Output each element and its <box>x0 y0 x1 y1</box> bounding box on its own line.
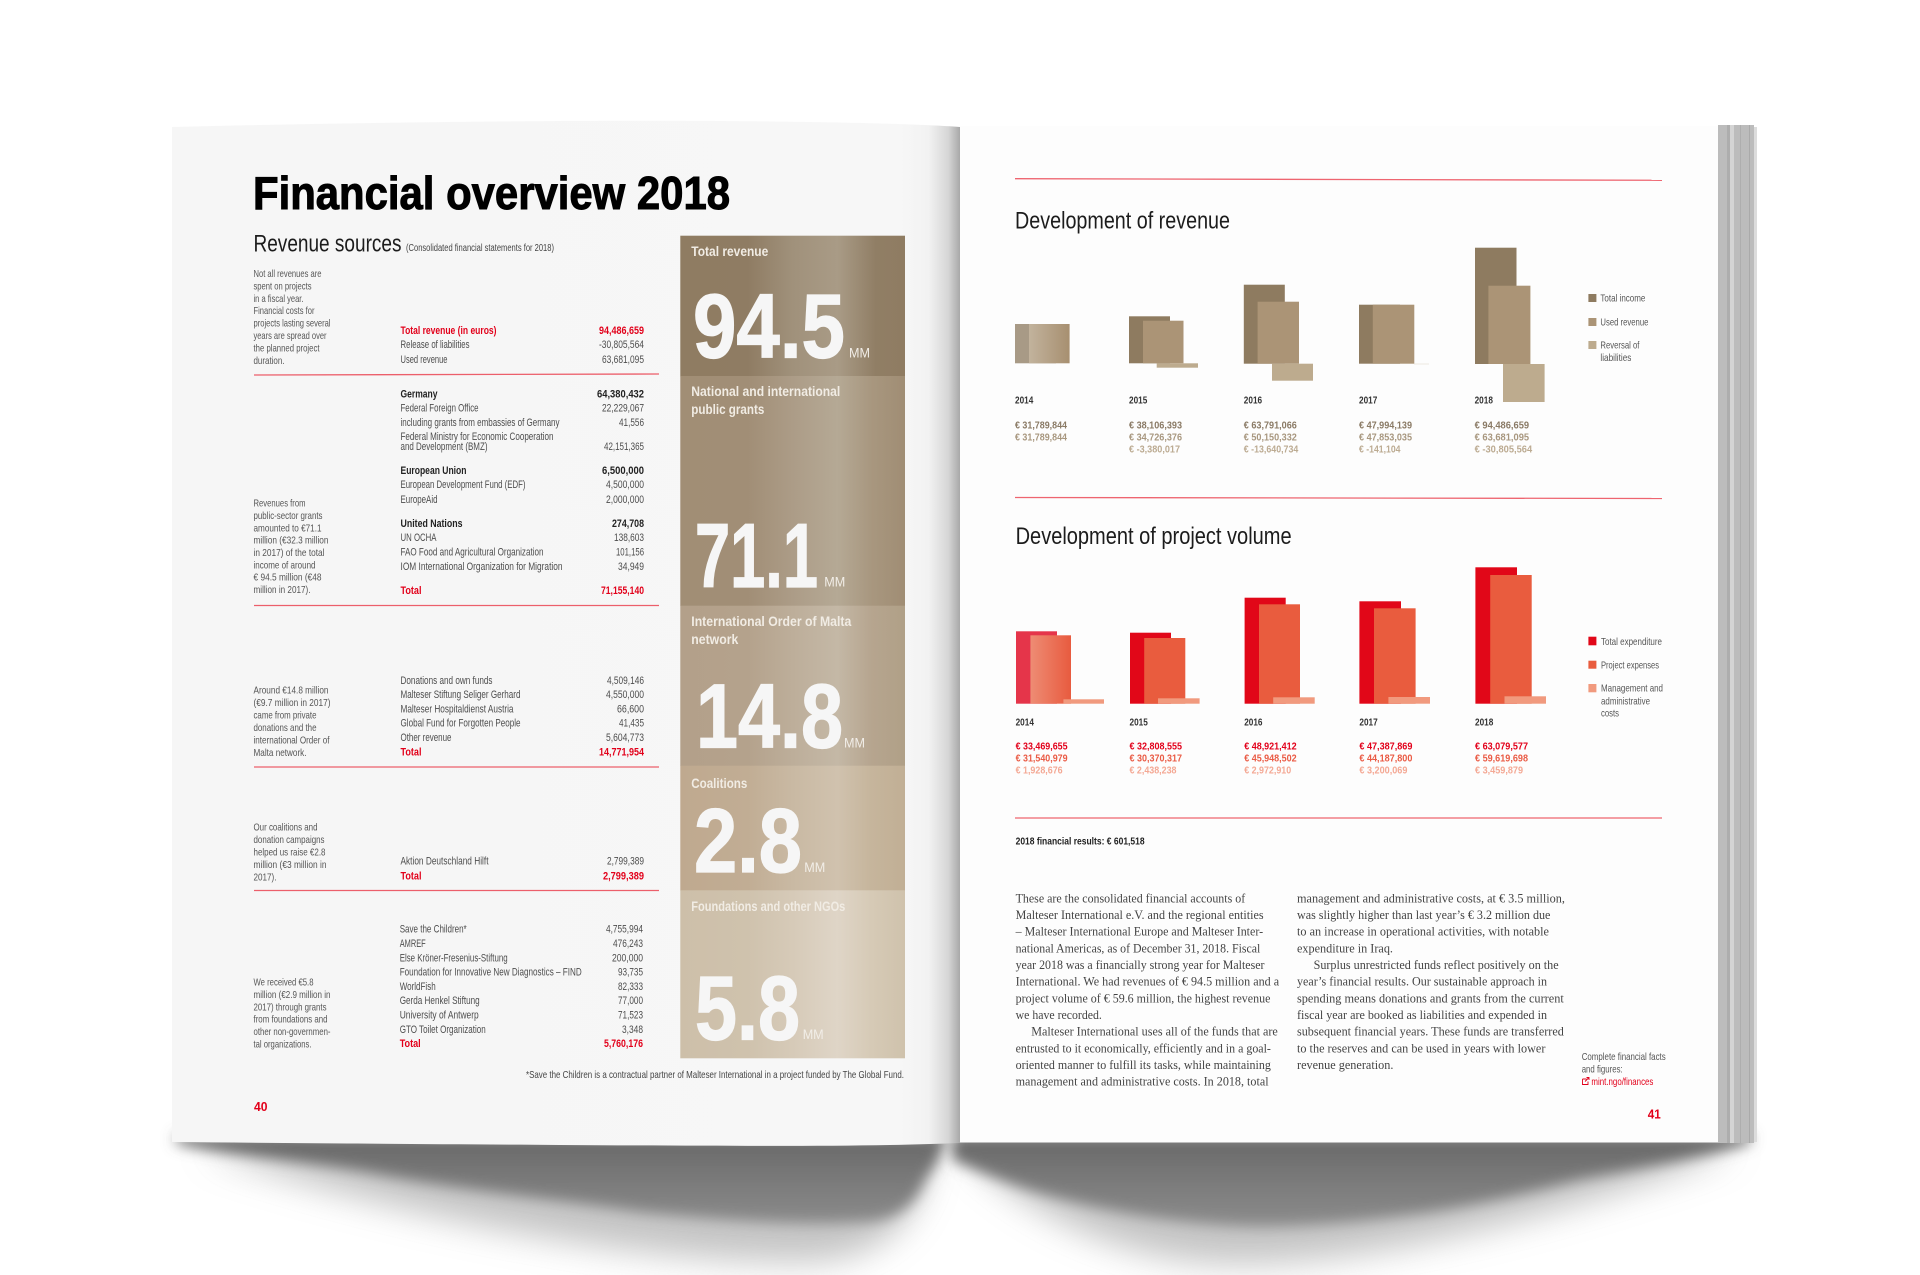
legend: revenue: liabilities <box>1600 352 1631 364</box>
text block: column 1: entrusted to it economically, efficiently and in a goal- <box>1016 1041 1271 1055</box>
note: order of malta: Around €14.8 million <box>254 684 329 696</box>
table: order of malta <box>400 675 645 758</box>
bars 2018 <box>1475 248 1545 402</box>
bars 2015 <box>1130 633 1200 704</box>
figures 2014: 2014 <box>1016 716 1034 728</box>
table: public grants: 2,000,000 <box>606 494 644 506</box>
figures 2018: € -30,805,564 <box>1475 444 1532 456</box>
panel: coalitions: Coalitions <box>691 776 747 791</box>
figures 2017: € 47,387,869 <box>1359 740 1413 752</box>
legend: project volume: Total expenditure <box>1601 636 1662 648</box>
table: public grants: EuropeAid <box>400 494 438 506</box>
table: order of malta: 4,550,000 <box>606 689 644 701</box>
figures 2014: € 1,928,676 <box>1016 764 1063 776</box>
chart: development of revenue <box>1015 248 1649 456</box>
text block: column 1: These are the consolidated financial accounts of <box>1016 891 1246 905</box>
table: public grants: IOM International Organization for Migration <box>400 561 562 573</box>
figures 2017: € -141,104 <box>1359 444 1401 456</box>
note: spending: projects lasting several <box>254 318 330 330</box>
figures 2017: € 47,994,139 <box>1359 420 1412 432</box>
figures 2017: 2017 <box>1359 716 1378 728</box>
note: coalitions <box>254 821 327 883</box>
figures 2014: € 31,789,844 <box>1015 420 1067 432</box>
note: foundations <box>254 976 331 1050</box>
panel: foundations and other NGOs: Foundations and other NGOs <box>691 899 845 914</box>
table: public grants: European Union <box>400 465 467 477</box>
figures 2016: 2016 <box>1244 394 1262 406</box>
figures 2018: 2018 <box>1475 716 1493 728</box>
panel: national and international public grants: MM <box>824 574 845 590</box>
note: order of malta: donations and the <box>254 722 317 734</box>
table: foundations: 77,000 <box>618 995 643 1007</box>
table: total revenue: 63,681,095 <box>602 354 644 366</box>
table: foundations: 71,523 <box>618 1010 643 1022</box>
table: coalitions: Total <box>400 870 422 882</box>
table: public grants <box>400 388 644 597</box>
table: public grants: and Development (BMZ) <box>400 441 488 453</box>
figures 2016: € 48,921,412 <box>1244 740 1297 752</box>
figures 2015: 2015 <box>1130 716 1148 728</box>
text block: column 2: management and administrative costs, at € 3.5 million, <box>1297 891 1565 905</box>
table: coalitions: 2,799,389 <box>607 856 644 868</box>
panel: international order of malta network: MM <box>844 734 865 750</box>
legend: project volume <box>1588 636 1663 720</box>
figures 2018 <box>1475 716 1528 776</box>
table: public grants: 274,708 <box>612 518 644 530</box>
note: spending: Financial costs for <box>254 305 315 317</box>
note: spending: in a fiscal year. <box>254 293 304 305</box>
icon: external link <box>1582 1078 1589 1084</box>
text block: column 2: Surplus unrestricted funds reflect positively on the <box>1314 958 1559 972</box>
panel: national and international public grants <box>680 376 905 607</box>
figures 2016: € 2,972,910 <box>1244 764 1291 776</box>
text block: column 1: Malteser International uses all of the funds that are <box>1031 1025 1278 1039</box>
table: public grants: FAO Food and Agricultural Organization <box>400 546 544 558</box>
table: public grants: 4,500,000 <box>606 479 644 491</box>
legend: project volume: Project expenses <box>1601 659 1659 671</box>
table: order of malta: 41,435 <box>619 718 644 730</box>
table: foundations: 476,243 <box>613 938 643 950</box>
table: foundations: Foundation for Innovative New Diagnostics – FIND <box>400 967 582 979</box>
text block: column 1: oriented manner to fulfill its tasks, while maintaining <box>1016 1058 1272 1072</box>
table: order of malta: 66,600 <box>617 703 644 715</box>
table: public grants: 71,155,140 <box>601 585 644 597</box>
figures 2014: € 31,540,979 <box>1016 752 1068 764</box>
note: public grants: in 2017) of the total <box>254 547 324 559</box>
figures 2016 <box>1244 394 1298 456</box>
table: coalitions: Aktion Deutschland Hilft <box>400 856 488 868</box>
table: order of malta: Global Fund for Forgotten People <box>400 718 520 730</box>
table: total revenue <box>400 325 644 366</box>
heading: development of revenue: Development of revenue <box>1015 207 1230 234</box>
text block: column 1: project volume of € 59.6 million, the highest revenue <box>1016 991 1271 1005</box>
panel: international order of malta network: 14.8 <box>696 667 843 768</box>
figures 2015: € 32,808,555 <box>1130 740 1182 752</box>
panel: international order of malta network <box>680 606 905 768</box>
note: foundations: from foundations and <box>254 1013 328 1025</box>
table: public grants: Federal Ministry for Economic Cooperation <box>400 431 554 443</box>
table: total revenue: Used revenue <box>400 354 448 366</box>
figures 2016: € 45,948,502 <box>1244 752 1297 764</box>
table: public grants: 138,603 <box>614 532 644 544</box>
table: order of malta: Donations and own funds <box>400 675 493 687</box>
side note with link <box>1582 1051 1666 1088</box>
figures 2018: € 59,619,698 <box>1475 752 1528 764</box>
note: spending: years are spread over <box>254 330 327 342</box>
table: public grants: 41,556 <box>619 417 644 429</box>
note: order of malta: (€9.7 million in 2017) <box>254 697 330 709</box>
bars 2014 <box>1015 324 1070 363</box>
heading: revenue sources: Revenue sources <box>254 230 402 258</box>
figures 2015: € 34,726,376 <box>1129 432 1182 444</box>
note: public grants: public-sector grants <box>254 510 322 522</box>
table: public grants: United Nations <box>400 518 462 530</box>
note: order of malta: came from private <box>254 710 317 722</box>
table: public grants: 42,151,365 <box>604 441 644 453</box>
table: foundations: 200,000 <box>612 952 643 964</box>
note: spending: spent on projects <box>254 280 312 292</box>
table: public grants: 22,229,067 <box>602 403 644 415</box>
bars 2017 <box>1359 305 1429 364</box>
panel: national and international public grants: public grants <box>691 402 764 417</box>
panel: national and international public grants: 71.1 <box>695 506 818 607</box>
table: total revenue: 94,486,659 <box>599 325 644 337</box>
table: coalitions <box>400 856 644 882</box>
figures 2015: € 30,370,317 <box>1130 752 1182 764</box>
panel: national and international public grants: National and international <box>691 384 840 399</box>
table: order of malta: Malteser Hospitaldienst Austria <box>400 703 514 715</box>
note: order of malta: Malta network. <box>254 747 306 759</box>
heading: revenue sources: (Consolidated financial statements for 2018) <box>406 243 554 254</box>
page number 41: 41 <box>1648 1107 1661 1121</box>
side note with link: mint.ngo/finances <box>1591 1076 1653 1088</box>
note: foundations: We received €5.8 <box>254 976 314 988</box>
note: public grants: million in 2017). <box>254 584 310 596</box>
legend: revenue: Total income <box>1600 293 1646 305</box>
page sheet: right <box>960 126 1718 1142</box>
panel: coalitions: MM <box>804 859 825 875</box>
table: order of malta: 14,771,954 <box>599 746 645 758</box>
note: spending <box>254 268 330 367</box>
text block: column 2: to an increase in operational activities, with notable <box>1297 925 1549 939</box>
table: total revenue: Release of liabilities <box>400 339 470 351</box>
text block: column 2: revenue generation. <box>1297 1058 1393 1072</box>
figures 2015: € -3,380,017 <box>1129 444 1180 456</box>
text block: column 2: subsequent financial years. These funds are transferred <box>1297 1025 1565 1039</box>
table: order of malta: Malteser Stiftung Seliger Gerhard <box>400 689 520 701</box>
title: Financial overview 2018 <box>253 167 730 219</box>
text block: column 1: International. We had revenues of € 94.5 million and a <box>1016 975 1280 989</box>
panel: international order of malta network: International Order of Malta <box>691 614 852 629</box>
table: foundations: Gerda Henkel Stiftung <box>400 995 480 1007</box>
left page <box>172 121 960 1146</box>
note: spending: Not all revenues are <box>254 268 322 280</box>
panel: total revenue: MM <box>849 345 870 361</box>
table: foundations: Else Kröner-Fresenius-Stiftung <box>400 952 508 964</box>
table: public grants: 101,156 <box>616 546 644 558</box>
panel: foundations and other NGOs: 5.8 <box>695 958 800 1059</box>
text block: column 1: national Americas, as of December 31, 2018. Fiscal <box>1016 941 1261 955</box>
note: public grants: million (€32.3 million <box>254 535 329 547</box>
legend: project volume: administrative <box>1601 695 1650 707</box>
figures 2017: 2017 <box>1359 394 1377 406</box>
financial results line: 2018 financial results: € 601,518 <box>1016 835 1145 847</box>
legend: revenue: Reversal of <box>1600 340 1639 352</box>
table: public grants: 64,380,432 <box>597 388 644 400</box>
table: order of malta: Other revenue <box>400 732 452 744</box>
legend: project volume: Management and <box>1601 683 1663 695</box>
figures 2014 <box>1016 716 1068 776</box>
figures 2017: € 3,200,069 <box>1359 764 1408 776</box>
figures 2016: € 50,150,332 <box>1244 432 1297 444</box>
figures 2015: € 2,438,238 <box>1130 764 1177 776</box>
panel: coalitions: 2.8 <box>694 791 802 892</box>
table: foundations: 5,760,176 <box>604 1038 643 1050</box>
table: public grants: including grants from embassies of Germany <box>400 417 560 429</box>
panel: total revenue: 94.5 <box>693 276 845 377</box>
table: foundations: AMREF <box>400 938 426 950</box>
note: coalitions: million (€3 million in <box>254 859 327 871</box>
table: coalitions: 2,799,389 <box>603 870 644 882</box>
figures 2014 <box>1015 394 1067 444</box>
page sheet: left <box>172 121 960 1146</box>
figures 2016: € 63,791,066 <box>1244 420 1297 432</box>
figures 2014: € 33,469,655 <box>1016 740 1068 752</box>
page stack edge <box>1718 125 1757 1143</box>
legend: project volume: costs <box>1601 708 1619 720</box>
side note with link: Complete financial facts <box>1582 1051 1666 1063</box>
table: foundations: 93,735 <box>618 967 643 979</box>
table: order of malta: 5,604,773 <box>606 732 644 744</box>
text block: column 2: fiscal year are booked as liabilities and expended in <box>1297 1008 1548 1022</box>
text block: column 1: year 2018 was a financially strong year for Malteser <box>1016 958 1265 972</box>
note: coalitions: Our coalitions and <box>254 821 318 833</box>
figures 2015: 2015 <box>1129 394 1147 406</box>
text block: column 2: spending means donations and grants from the current <box>1297 991 1564 1005</box>
text block: column 2 <box>1297 891 1565 1072</box>
chart: development of project volume <box>1016 567 1663 776</box>
text block: column 2: expenditure in Iraq. <box>1297 941 1393 955</box>
note: spending: the planned project <box>254 342 320 354</box>
panel: coalitions <box>680 766 905 892</box>
note: foundations: million (€2.9 million in <box>254 989 331 1001</box>
right page <box>960 126 1718 1142</box>
figures 2018: € 63,681,095 <box>1475 432 1529 444</box>
bars 2016 <box>1244 285 1313 381</box>
note: foundations: 2017) through grants <box>254 1001 326 1013</box>
note: foundations: tal organizations. <box>254 1038 312 1050</box>
figures 2015 <box>1130 716 1182 776</box>
figures 2017 <box>1359 394 1412 456</box>
note: public grants: amounted to €71.1 <box>254 522 322 534</box>
table: foundations: University of Antwerp <box>400 1010 479 1022</box>
table: foundations: Save the Children* <box>400 923 467 935</box>
table: order of malta: 4,509,146 <box>607 675 644 687</box>
text block: column 1: management and administrative costs. In 2018, total <box>1016 1075 1269 1089</box>
table: public grants: 6,500,000 <box>602 465 644 477</box>
figures 2018: € 94,486,659 <box>1475 420 1529 432</box>
heading: development of project volume: Development of project volume <box>1016 523 1292 550</box>
text block: column 2: was slightly higher than last year’s € 3.2 million due <box>1297 908 1551 922</box>
figures 2014: 2014 <box>1015 394 1033 406</box>
note: foundations: other non-governmen- <box>254 1026 331 1038</box>
table: foundations: 4,755,994 <box>606 923 643 935</box>
figures 2016: 2016 <box>1244 716 1263 728</box>
page number 40: 40 <box>254 1100 268 1114</box>
table: foundations: 3,348 <box>622 1024 643 1036</box>
table: total revenue: -30,805,564 <box>599 339 644 351</box>
note: public grants <box>254 498 329 596</box>
text block: column 1: – Malteser International Europe and Malteser Inter- <box>1015 925 1263 939</box>
legend: revenue: Used revenue <box>1600 317 1649 329</box>
table: foundations: 82,333 <box>618 981 643 993</box>
table: public grants: Federal Foreign Office <box>400 403 478 415</box>
note: spending: duration. <box>254 355 284 367</box>
text block: column 1 <box>1015 891 1280 1089</box>
table: public grants: Germany <box>400 388 438 400</box>
bars 2014 <box>1016 631 1104 704</box>
panel: international order of malta network: network <box>691 632 739 647</box>
table: foundations <box>400 923 643 1050</box>
bars 2016 <box>1245 598 1315 704</box>
figures 2016 <box>1244 716 1297 776</box>
table: foundations: WorldFish <box>400 981 436 993</box>
note: coalitions: helped us raise €2.8 <box>254 846 326 858</box>
figures 2018: € 3,459,879 <box>1475 764 1523 776</box>
figures 2017: € 47,853,035 <box>1359 432 1412 444</box>
text block: column 1: we have recorded. <box>1016 1008 1102 1022</box>
table: order of malta: Total <box>400 746 422 758</box>
bars 2018 <box>1475 567 1546 704</box>
figures 2016: € -13,640,734 <box>1244 444 1298 456</box>
note: order of malta: international Order of <box>254 734 330 746</box>
side note with link: and figures: <box>1582 1064 1623 1076</box>
note: public grants: Revenues from <box>254 498 306 510</box>
note: coalitions: 2017). <box>254 871 276 883</box>
figures 2018 <box>1475 394 1532 456</box>
table: foundations: GTO Toilet Organization <box>400 1024 486 1036</box>
book shadow <box>176 1135 1752 1264</box>
table: total revenue: Total revenue (in euros) <box>400 325 497 337</box>
note: public grants: € 94.5 million (€48 <box>254 572 322 584</box>
text block: column 2: year’s financial results. Our sustainable approach in <box>1297 975 1548 989</box>
text block: column 2: to the reserves and can be used in years with lower <box>1297 1041 1546 1055</box>
figures 2015 <box>1129 394 1182 456</box>
panel: total revenue: Total revenue <box>691 244 769 259</box>
bars 2017 <box>1359 601 1430 704</box>
heading: revenue sources <box>254 230 554 258</box>
table: foundations: Total <box>400 1038 421 1050</box>
table: public grants: UN OCHA <box>400 532 437 544</box>
panel: total revenue <box>680 236 905 377</box>
note: coalitions: donation campaigns <box>254 834 324 846</box>
note: public grants: income of around <box>254 559 316 571</box>
panel: foundations and other NGOs <box>680 890 905 1059</box>
figures 2014: € 31,789,844 <box>1015 432 1067 444</box>
table: public grants: Total <box>400 585 422 597</box>
bars 2015 <box>1129 316 1198 368</box>
panel: foundations and other NGOs: MM <box>803 1026 824 1042</box>
text block: column 1: Malteser International e.V. and the regional entities <box>1016 908 1264 922</box>
figures 2018: 2018 <box>1475 394 1493 406</box>
figures 2017: € 44,187,800 <box>1359 752 1413 764</box>
note: order of malta <box>254 684 330 759</box>
figures 2017 <box>1359 716 1413 776</box>
figures 2015: € 38,106,393 <box>1129 420 1182 432</box>
footnote: *Save the Children is a contractual partner of Malteser International in a project funded by The Global Fund. <box>526 1069 904 1081</box>
figures 2018: € 63,079,577 <box>1475 740 1528 752</box>
legend: revenue <box>1588 293 1649 364</box>
table: public grants: European Development Fund (EDF) <box>400 479 526 491</box>
table: public grants: 34,949 <box>618 561 644 573</box>
